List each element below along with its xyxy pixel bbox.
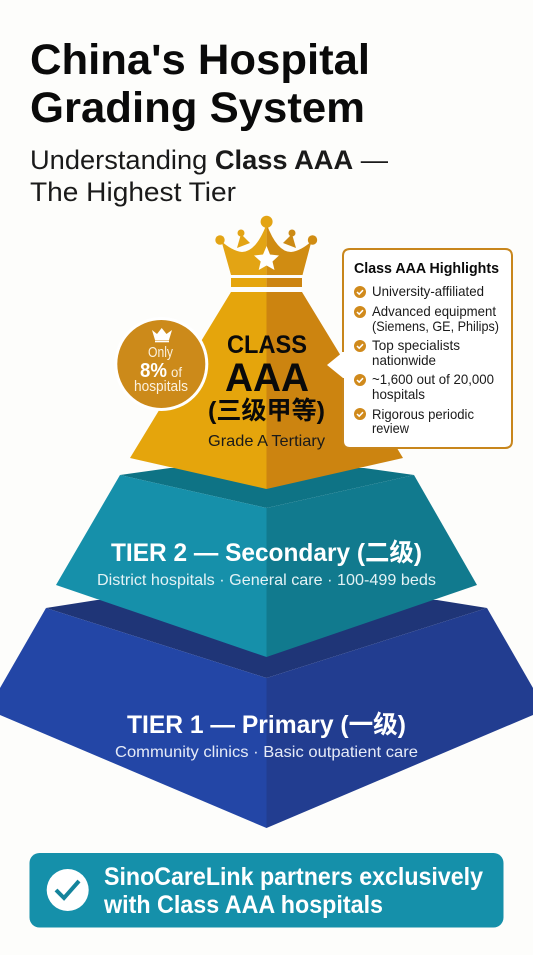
footer banner [30, 853, 504, 928]
highlight check icons [354, 286, 366, 420]
footer text: SinoCareLink partners exclusively [104, 863, 483, 891]
highlight items: ~1,600 out of 20,000 [372, 371, 494, 387]
icon: check circle [47, 869, 89, 911]
class AAA label [208, 331, 325, 425]
badge text: 8% [140, 360, 167, 382]
class AAA pyramid top [130, 292, 403, 489]
class AAA label: CLASS [227, 331, 307, 359]
tier 2 pyramid layer [56, 468, 477, 657]
subtitle: The Highest Tier [30, 177, 236, 207]
class AAA label: (三级甲等) [208, 397, 325, 425]
highlight items: (Siemens, GE, Philips) [372, 318, 499, 334]
highlight items: hospitals [372, 386, 425, 402]
highlight items: nationwide [372, 352, 436, 368]
icon: small crown [152, 328, 172, 342]
callout heading: Class AAA Highlights [354, 261, 499, 277]
highlight items: Rigorous periodic [372, 406, 474, 422]
callout: class AAA highlights [327, 249, 512, 448]
tier 1 pyramid layer [0, 600, 533, 828]
tier 1 label: TIER 1 — Primary (一级) [127, 711, 406, 739]
icon: crown [215, 216, 317, 287]
badge text: hospitals [134, 378, 188, 395]
highlight items: University-affiliated [372, 283, 484, 299]
footer text [103, 863, 483, 919]
highlight items: Top specialists [372, 337, 460, 353]
class AAA label: AAA [225, 356, 309, 400]
title: China's Hospital [30, 36, 370, 84]
tier 2 description: District hospitals · General care · 100-499 beds [97, 572, 436, 589]
subtitle [30, 145, 388, 207]
tier 1 description: Community clinics · Basic outpatient care [115, 744, 418, 761]
tier 2 label: TIER 2 — Secondary (二级) [111, 539, 422, 567]
title: Grading System [30, 84, 365, 132]
badge text [134, 344, 188, 395]
badge: only 8% of hospitals [114, 317, 208, 411]
badge text: Only [148, 344, 173, 361]
subtitle: Understanding Class AAA — [30, 145, 388, 175]
footer text: with Class AAA hospitals [103, 891, 383, 919]
highlight items: Advanced equipment [372, 303, 496, 319]
title [30, 36, 370, 132]
highlight items: review [372, 420, 410, 436]
grade a tertiary: Grade A Tertiary [208, 433, 325, 450]
badge text: of [171, 364, 182, 380]
highlight items [372, 283, 499, 436]
